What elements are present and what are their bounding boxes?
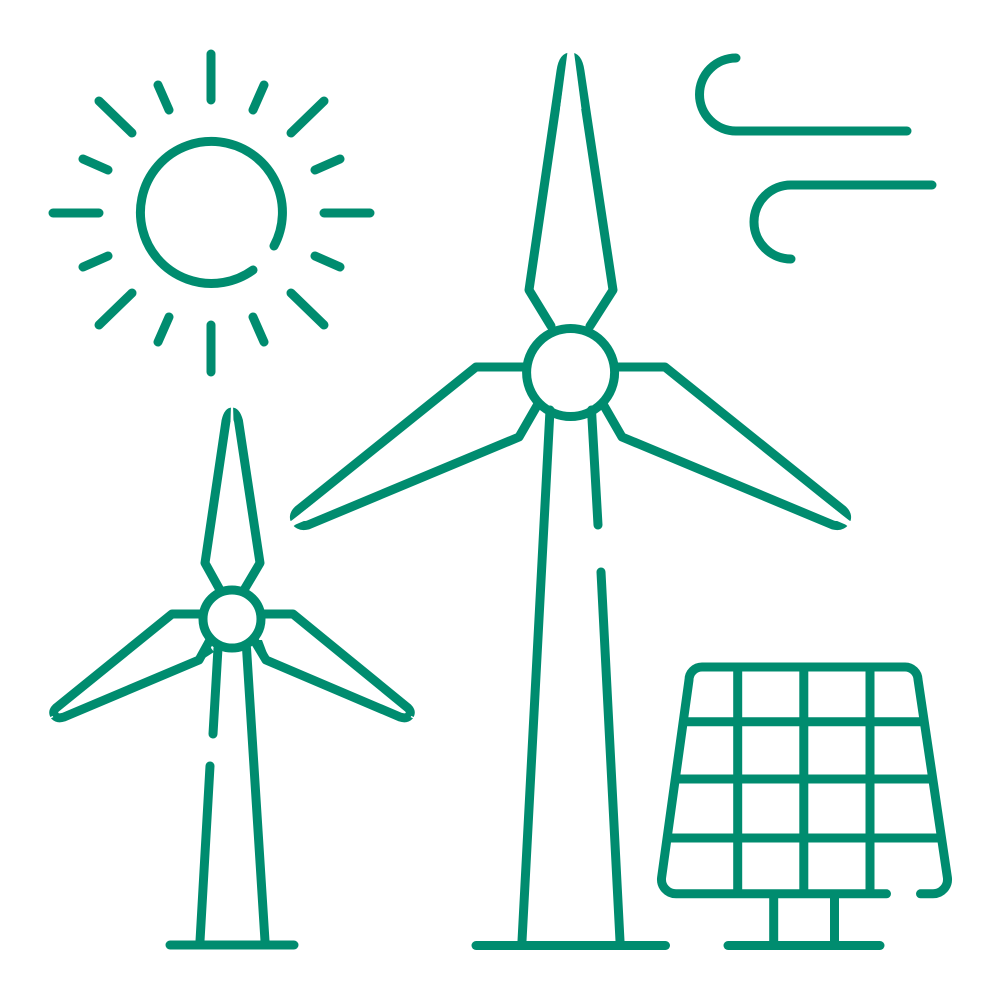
icon: wind lines (700, 58, 932, 259)
icon: large wind turbine (286, 48, 855, 946)
icon: solar panel (661, 667, 948, 946)
icon: small wind turbine (46, 405, 418, 945)
icon: sun (53, 54, 370, 372)
